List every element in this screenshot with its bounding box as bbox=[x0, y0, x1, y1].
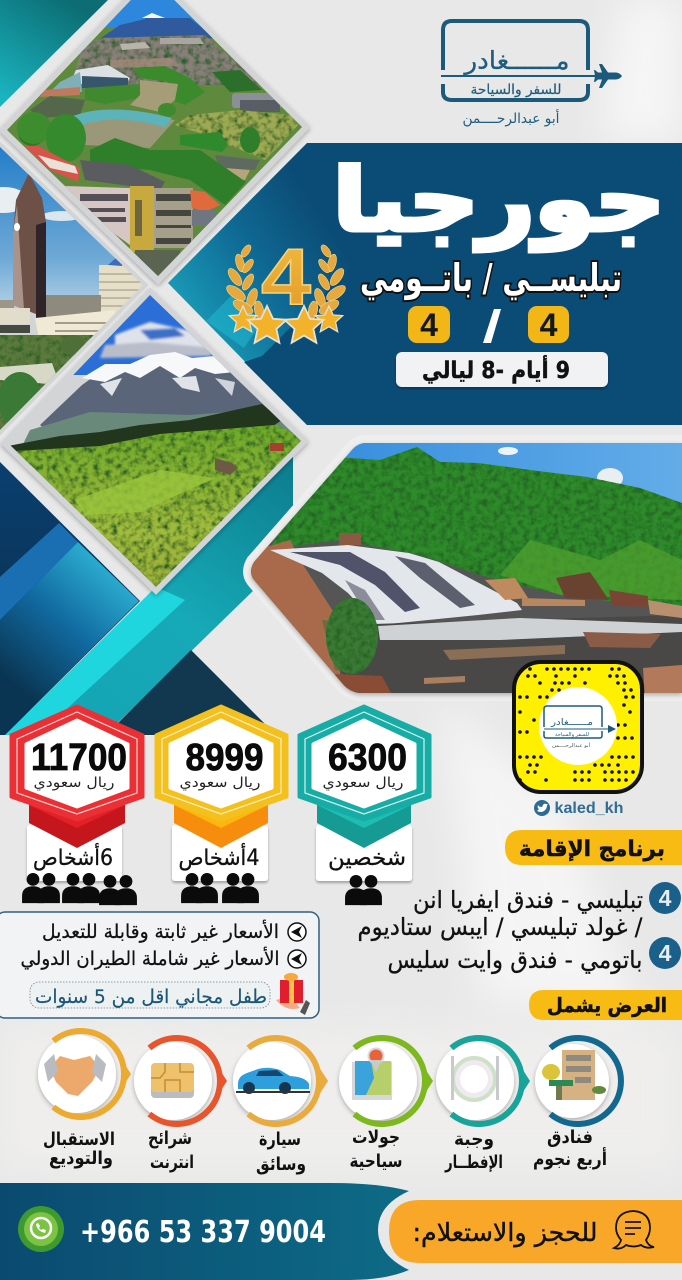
includes: handshake: الاستقبال bbox=[43, 1129, 115, 1150]
includes: car and driver bbox=[233, 1038, 328, 1175]
hotel list: باتومي - فندق وايت سليس bbox=[388, 946, 642, 974]
logo: للسفر والسياحة bbox=[470, 82, 562, 98]
includes: SIM cards bbox=[134, 1038, 227, 1173]
icon: plane bbox=[594, 64, 622, 88]
footer: booking call-to-action: للحجز والاستعلام: bbox=[412, 1218, 598, 1248]
includes: handshake bbox=[38, 1031, 131, 1169]
includes: tours: جولات bbox=[352, 1127, 400, 1148]
left laurel bbox=[224, 243, 265, 320]
icon: number 4 bbox=[649, 937, 681, 969]
photo: Tbilisi city diamond bbox=[0, 0, 310, 278]
photo: waterfall bbox=[240, 440, 682, 700]
price card: 6 persons bbox=[11, 706, 143, 905]
star rating boxes: 4 bbox=[420, 307, 438, 343]
notes box: الأسعار غير ثابتة وقابلة للتعديل bbox=[42, 920, 279, 943]
photo: mountain meadow diamond bbox=[0, 295, 310, 600]
logo: أبو عبدالرحــــمن bbox=[462, 109, 560, 127]
panel: bottom-left blue stripes bbox=[0, 448, 293, 740]
includes: hotels: فنادق bbox=[547, 1127, 593, 1148]
includes: tours: سياحية bbox=[350, 1151, 402, 1172]
includes: SIM cards: انترنت bbox=[150, 1152, 194, 1173]
includes: breakfast bbox=[436, 1038, 530, 1173]
footer: booking call-to-action bbox=[389, 1200, 682, 1263]
hotel list: تبليسي - فندق ايفريا انن bbox=[413, 886, 643, 914]
icon: six people bbox=[22, 873, 137, 905]
duration pill: 9 أيام -8 ليالي bbox=[422, 354, 570, 384]
logo: مــــــغادر bbox=[462, 46, 570, 75]
icon: number 4 bbox=[649, 882, 681, 914]
icon: two people bbox=[345, 875, 382, 905]
heading: the offer includes: العرض يشمل bbox=[547, 993, 667, 1017]
includes: car and driver: سيارة bbox=[259, 1129, 301, 1150]
diagonal teal band bbox=[0, 448, 293, 740]
includes: hotels bbox=[533, 1038, 621, 1170]
icon: bullet arrow bbox=[288, 950, 306, 968]
snapchat handle: kaled_kh bbox=[554, 800, 624, 817]
heading: accommodation program bbox=[505, 830, 682, 865]
hotel list bbox=[358, 882, 681, 974]
price card: 2 persons: ريال سعودي bbox=[322, 775, 404, 791]
phone number: +966 53 337 9004 bbox=[80, 1215, 326, 1250]
includes: hotels: أربع نجوم bbox=[533, 1147, 607, 1170]
price card: 4 persons bbox=[156, 706, 287, 903]
star rating boxes bbox=[408, 306, 569, 343]
icon: four people bbox=[181, 873, 259, 903]
icon: number 4: 4 bbox=[659, 885, 672, 911]
icon: gift in hand bbox=[276, 973, 310, 1015]
stars bbox=[229, 306, 343, 343]
price card: 4 persons: 8999 bbox=[186, 737, 264, 779]
logo bbox=[441, 21, 622, 127]
includes: car and driver: وسائق bbox=[256, 1154, 306, 1175]
icon: blue car bbox=[236, 1068, 310, 1094]
icon: twitter bird bbox=[534, 800, 550, 816]
icon: plate and cutlery bbox=[451, 1056, 499, 1100]
snapcode bbox=[514, 662, 642, 792]
includes: breakfast: الإفطــار bbox=[444, 1152, 503, 1173]
price card: 2 persons: شخصين bbox=[328, 846, 406, 871]
panel: main blue title panel bbox=[168, 143, 682, 425]
snapcode: للسفر والسياحة bbox=[555, 732, 589, 738]
hotel list: / غولد تبليسي / ايبس ستاديوم bbox=[358, 913, 643, 941]
snapcode: مــــــغادر bbox=[550, 718, 593, 728]
right laurel bbox=[307, 243, 348, 320]
price card: 6 persons: ريال سعودي bbox=[34, 775, 114, 791]
notes box: الأسعار غير شاملة الطيران الدولي bbox=[20, 947, 280, 970]
duration pill bbox=[396, 352, 608, 387]
icon: number 4: 4 bbox=[659, 940, 672, 966]
heading: accommodation program: برنامج الإقامة bbox=[519, 837, 665, 862]
cyan band highlight bbox=[0, 587, 185, 740]
price card: 2 persons bbox=[299, 706, 430, 905]
star rating boxes: 4 bbox=[540, 307, 558, 343]
price card: 4 persons: 4أشخاص bbox=[178, 843, 260, 871]
price card: 6 persons: 6أشخاص bbox=[33, 843, 113, 871]
icon: handshake bbox=[44, 1054, 106, 1096]
icon: SIM chip bbox=[151, 1063, 194, 1098]
photo: city tower bbox=[0, 140, 150, 435]
icon: map with pin bbox=[352, 1048, 392, 1100]
includes: SIM cards: شرائح bbox=[148, 1128, 192, 1149]
navy triangle bbox=[118, 650, 265, 735]
includes: handshake: والتوديع bbox=[49, 1148, 113, 1169]
icon: WhatsApp bbox=[18, 1206, 64, 1252]
price card: 6 persons: 11700 bbox=[31, 737, 127, 779]
icon: speech bubble bbox=[614, 1211, 654, 1249]
includes: tours bbox=[339, 1038, 433, 1172]
icon: gold four star badge bbox=[224, 232, 348, 343]
snapcode: أبو عبدالرحــــمن bbox=[552, 742, 591, 749]
gold number: 4 bbox=[261, 232, 312, 321]
includes: breakfast: وجبة bbox=[454, 1129, 494, 1150]
price card: 4 persons: ريال سعودي bbox=[180, 775, 260, 791]
footer: phone band bbox=[0, 1183, 409, 1280]
panel: top-left teal corner bbox=[0, 0, 108, 107]
price card: 2 persons: 6300 bbox=[328, 737, 407, 779]
icon: bullet arrow bbox=[288, 923, 306, 941]
notes box bbox=[0, 912, 319, 1018]
title: جورجيا bbox=[333, 151, 665, 251]
icon: hotel bbox=[542, 1050, 606, 1100]
heading: the offer includes bbox=[529, 990, 682, 1020]
free child pill: طفل مجاني اقل من 5 سنوات bbox=[35, 986, 267, 1008]
